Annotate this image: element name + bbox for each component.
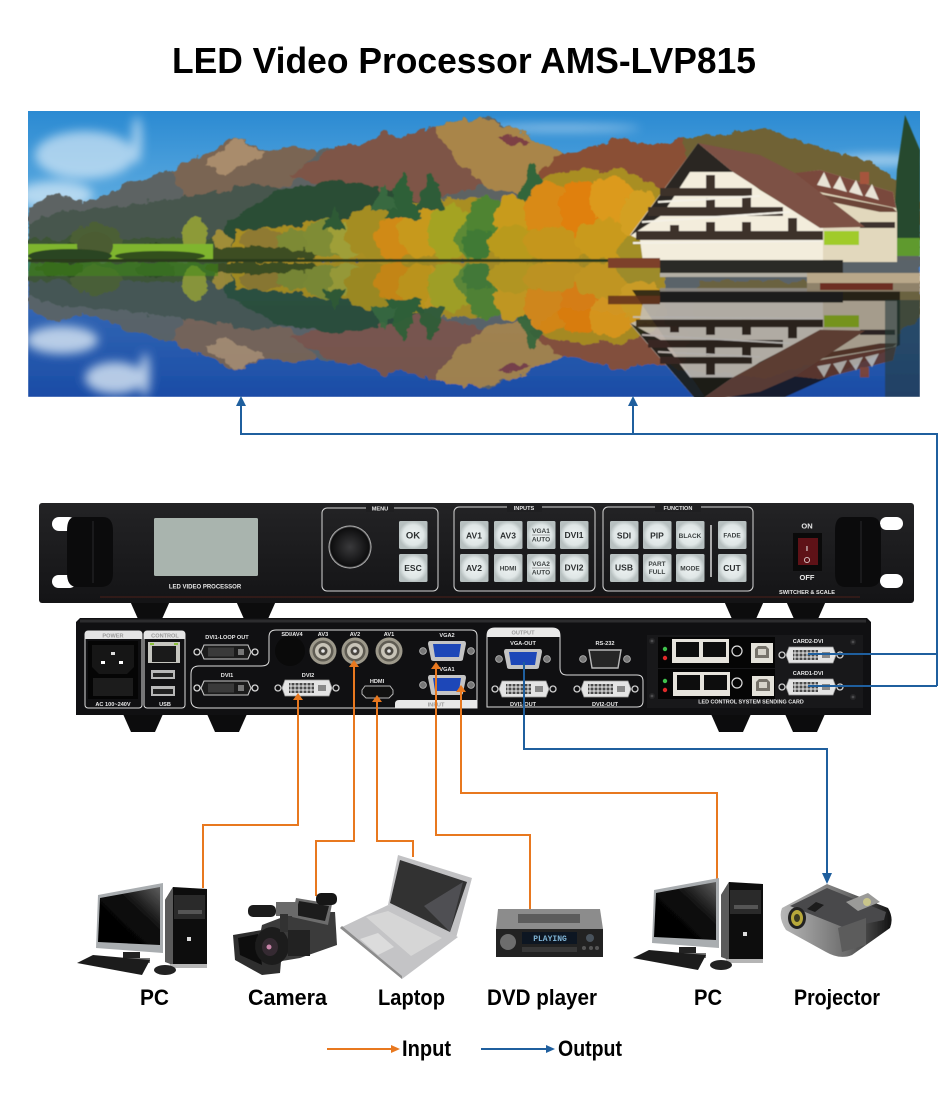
function group: MODE [680, 566, 700, 572]
sending card: CARD1-DVI [793, 671, 824, 677]
inputs group [454, 504, 595, 591]
device feet, front unit [130, 601, 826, 619]
inputs group: AUTO [532, 570, 550, 576]
brand label: LED VIDEO PROCESSOR [169, 584, 242, 590]
DVI loop connectors [194, 635, 258, 695]
input tab: INPUT [428, 702, 445, 708]
control section: CONTROL [151, 634, 179, 640]
legend: input [327, 1036, 452, 1061]
sending card: CARD2-DVI [793, 639, 824, 645]
icon: PC output source [633, 878, 763, 970]
device feet, rear unit [123, 714, 825, 732]
output section: DVI1-OUT [510, 702, 537, 708]
arrowhead to projector [822, 873, 832, 884]
power section: POWER [102, 634, 124, 640]
device labels: PC [694, 985, 722, 1010]
power switch [779, 522, 835, 596]
device labels: PC [140, 985, 169, 1010]
dark hotel reflection base [632, 290, 900, 397]
blue VGA output line to projector [524, 662, 827, 876]
arrowhead to screen right [628, 396, 638, 406]
inputs group: DVI1 [565, 530, 584, 540]
function group: PIP [650, 530, 664, 540]
title: LED Video Processor AMS-LVP815 [172, 40, 756, 81]
device labels: Laptop [378, 985, 445, 1010]
menu group: ESC [404, 563, 422, 573]
function group: CUT [723, 563, 742, 573]
orange input wiring [203, 665, 717, 909]
sending card: LED CONTROL SYSTEM SENDING CARD [698, 700, 804, 706]
inputs group: AV1 [466, 530, 482, 540]
control section [144, 631, 185, 708]
device labels: DVD player [487, 985, 597, 1010]
legend: output: Output [558, 1036, 623, 1061]
blue output wiring from sending card to screen [241, 402, 937, 686]
inputs group: AV2 [466, 563, 482, 573]
SDI and BNC inputs: AV3 [318, 632, 328, 638]
SDI and BNC inputs: AV1 [384, 632, 394, 638]
power switch: I [806, 546, 808, 553]
icon: DVD player: PLAYING [533, 935, 567, 944]
inputs group: AV3 [500, 530, 516, 540]
output section: VGA-OUT [510, 641, 536, 647]
sending card [647, 635, 863, 708]
legend: output [481, 1036, 623, 1061]
SDI and BNC inputs: AV2 [350, 632, 360, 638]
DVI2 and HDMI inputs: DVI2 [302, 673, 314, 679]
device labels: Camera [248, 985, 328, 1010]
processor front panel [39, 503, 914, 603]
icon: PC input [77, 883, 207, 975]
icon: DVD player [496, 909, 603, 957]
blue card output ends drawn over connectors [808, 654, 937, 686]
power section: AC 100~240V [95, 702, 131, 708]
menu group: OK [406, 530, 420, 542]
inputs group: DVI2 [565, 562, 584, 572]
power switch: OFF [800, 573, 815, 582]
DVI2 and HDMI inputs [275, 673, 393, 698]
inputs group: VGA1 [532, 528, 550, 535]
DVI2 and HDMI inputs: HDMI [370, 679, 385, 685]
function group: FULL [649, 569, 665, 576]
right mounting ear [835, 517, 903, 588]
menu group [322, 504, 438, 591]
SDI and BNC inputs: SDI/AV4 [281, 632, 304, 638]
function group: FUNCTION [664, 506, 692, 512]
VGA inputs: VGA2 [439, 633, 455, 639]
power section [85, 631, 142, 708]
legend: input: Input [402, 1036, 452, 1061]
DVI loop connectors: DVI1-LOOP OUT [205, 635, 249, 641]
input tab [395, 700, 477, 708]
LED screen landscape photo [17, 111, 925, 402]
DVI loop connectors: DVI1 [221, 673, 233, 679]
power switch: ON [801, 522, 813, 530]
VGA inputs: VGA1 [439, 667, 455, 673]
output section: OUTPUT [512, 630, 535, 636]
output section [487, 628, 643, 708]
function group: USB [615, 562, 633, 572]
VGA inputs [420, 633, 474, 695]
function group: PART [648, 561, 666, 568]
reflecting water [28, 260, 920, 397]
function group: BLACK [679, 533, 702, 540]
inputs group: VGA2 [532, 561, 550, 568]
left mounting ear [52, 517, 113, 588]
inputs group: INPUTS [514, 506, 535, 512]
inputs group: AUTO [532, 536, 550, 544]
input section outline [191, 630, 477, 708]
device labels [140, 985, 880, 1010]
power switch: SWITCHER & SCALE [779, 590, 835, 596]
function group: SDI [617, 530, 631, 540]
menu group: MENU [372, 506, 388, 512]
output section: DVI2-OUT [592, 702, 619, 708]
function group: FADE [723, 532, 741, 540]
icon: camera [233, 893, 337, 975]
LCD display [154, 518, 258, 576]
icon: laptop [340, 855, 472, 979]
function group [603, 504, 753, 591]
arrowhead to screen left [236, 396, 246, 406]
inputs group: HDMI [500, 566, 516, 572]
output section: RS-232 [596, 641, 614, 647]
SDI and BNC inputs [275, 632, 402, 666]
device labels: Projector [794, 985, 880, 1010]
processor rear panel [76, 618, 871, 715]
control section: USB [159, 702, 171, 708]
orange arrowheads at input ports [293, 660, 466, 702]
icon: projector [781, 884, 892, 957]
